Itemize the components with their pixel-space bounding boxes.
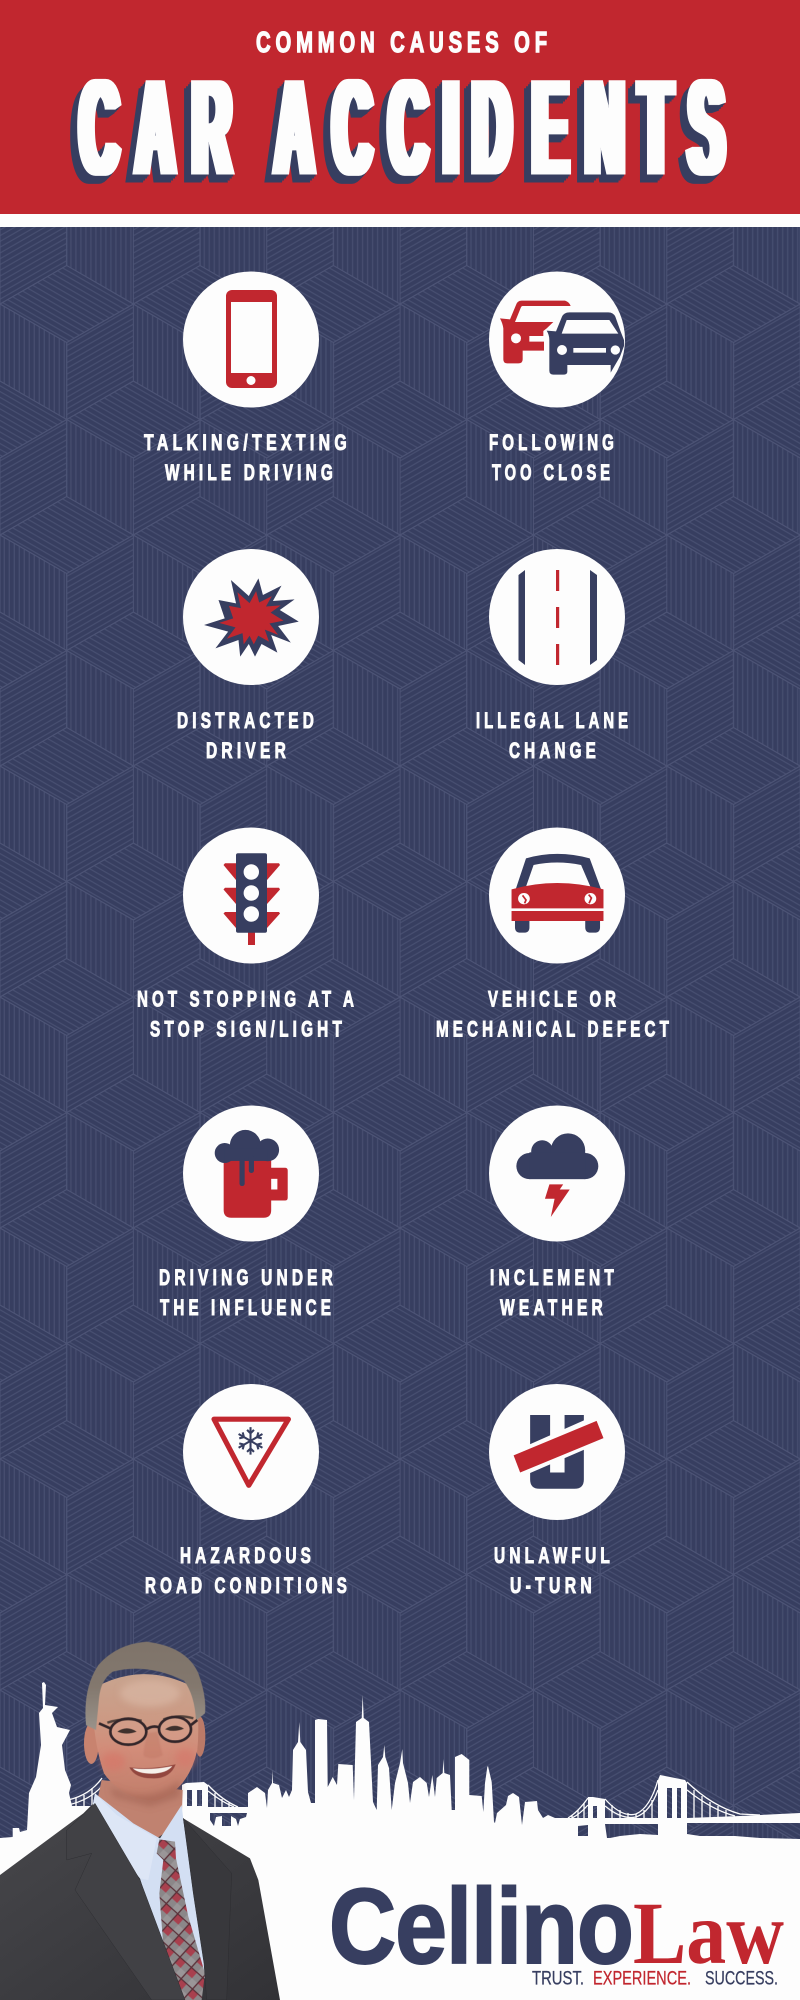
- cause: hazardous road conditions: [145, 1384, 351, 1598]
- label: illegal lane change: [476, 708, 632, 763]
- icon: beer mug: [215, 1130, 288, 1218]
- label: distracted driver: [177, 708, 318, 763]
- label: vehicle defect: [436, 986, 673, 1042]
- label: inclement weather: INCLEMENT: [490, 1265, 618, 1290]
- tagline: SUCCESS.: [705, 1968, 778, 1990]
- suit jacket: [0, 1802, 280, 2000]
- label: following too close: FOLLOWING: [489, 430, 618, 455]
- tagline: TRUST.: [532, 1968, 584, 1990]
- label: vehicle defect: MECHANICAL DEFECT: [436, 1016, 673, 1042]
- cause: distracted driver: [177, 549, 319, 763]
- icon: no u-turn: [509, 1414, 607, 1489]
- label: illegal lane change: CHANGE: [509, 738, 600, 763]
- label: unlawful u-turn: [494, 1543, 614, 1598]
- icon: crash starburst: [204, 578, 299, 657]
- icon: smartphone: [226, 290, 277, 388]
- label: hazardous road conditions: HAZARDOUS: [180, 1543, 315, 1568]
- title: CAR ACCIDENTS: [80, 52, 724, 205]
- wordmark: Cellino: Cellino: [329, 1866, 633, 1986]
- left lapel: [67, 1803, 185, 2000]
- label: following too close: [489, 430, 618, 485]
- cause: vehicle defect: [436, 828, 673, 1042]
- label: vehicle defect: VEHICLE OR: [488, 986, 620, 1012]
- cause: inclement weather: [489, 1106, 625, 1320]
- subtitle: COMMON CAUSES OF: [256, 27, 552, 59]
- face shading: [101, 1680, 195, 1807]
- label: distracted driver: DRIVER: [206, 738, 290, 763]
- ears: [84, 1723, 99, 1764]
- cause: not stopping: [137, 828, 358, 1042]
- label: hazardous road conditions: [145, 1543, 351, 1598]
- cause: illegal lane change: [476, 549, 632, 763]
- icon: yield sign with snowflake: [214, 1419, 288, 1485]
- label: inclement weather: [490, 1265, 618, 1320]
- glasses: [99, 1717, 197, 1745]
- label: distracted driver: DISTRACTED: [177, 708, 318, 733]
- tagline: EXPERIENCE.: [593, 1968, 691, 1990]
- icon: storm cloud: [516, 1133, 598, 1217]
- label: hazardous road conditions: ROAD CONDITIONS: [145, 1573, 351, 1598]
- label: illegal lane change: ILLEGAL LANE: [476, 708, 632, 733]
- label: unlawful u-turn: U-TURN: [510, 1573, 596, 1598]
- wordmark: Law: Law: [633, 1885, 784, 1983]
- label: not stopping: STOP SIGN/LIGHT: [150, 1016, 346, 1042]
- label: following too close: TOO CLOSE: [492, 460, 614, 485]
- eyebrows: [107, 1716, 193, 1723]
- right lapel: [183, 1818, 232, 2000]
- header banner: [0, 0, 800, 214]
- tagline: [532, 1968, 778, 1990]
- icon: car front: [512, 854, 603, 933]
- smile: [129, 1764, 176, 1778]
- label: talking/texting: [144, 430, 351, 485]
- white divider strip: [0, 214, 800, 227]
- cause: following too close: [489, 272, 625, 485]
- attorney portrait: [0, 1642, 280, 2000]
- label: talking/texting: WHILE DRIVING: [165, 460, 337, 485]
- hair: [85, 1642, 205, 1730]
- eyes: [117, 1728, 137, 1733]
- label: not stopping: NOT STOPPING AT A: [137, 986, 358, 1012]
- label: driving under the influence: [159, 1265, 337, 1320]
- neck: [97, 1780, 183, 1838]
- shirt: [91, 1793, 207, 2000]
- bridge cables: [68, 1778, 760, 1818]
- label: driving under the influence: THE INFLUENCE: [160, 1295, 335, 1320]
- face: [93, 1674, 198, 1801]
- icon: road lanes: [518, 570, 597, 665]
- label: inclement weather: WEATHER: [500, 1295, 607, 1320]
- New York skyline silhouette: [0, 1682, 800, 2000]
- icon: traffic light: [224, 853, 280, 945]
- label: driving under the influence: DRIVING UNDER: [159, 1265, 337, 1290]
- tie: [157, 1839, 205, 2000]
- nose shadow: [144, 1732, 163, 1758]
- label: unlawful u-turn: UNLAWFUL: [494, 1543, 614, 1568]
- cause: talking/texting: [144, 272, 351, 485]
- icon: two cars: [500, 301, 624, 375]
- label: talking/texting: TALKING/TEXTING: [144, 430, 351, 455]
- label: not stopping: [137, 986, 358, 1042]
- Cellino Law logo: [329, 1866, 784, 1990]
- cause: unlawful u-turn: [489, 1384, 625, 1598]
- cause: driving under the influence: [159, 1106, 337, 1320]
